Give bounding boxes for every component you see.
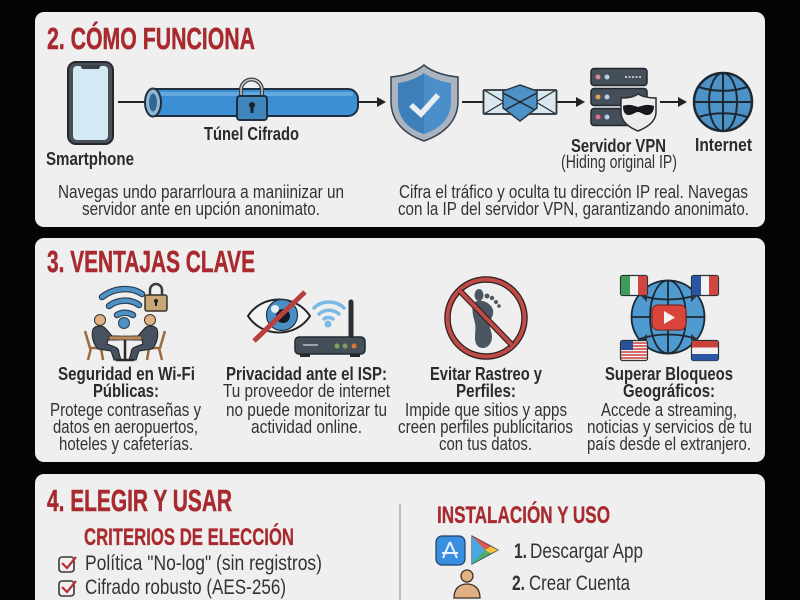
text: ISP advantage: [223, 364, 390, 437]
panel: cómo funciona: [35, 12, 765, 227]
text: cifrado: Cifrado robusto (AES-256): [85, 576, 286, 599]
text: wifi advantage: datos en aeropuertos,: [53, 417, 198, 437]
text: wifi advantage: hoteles y cafeterías.: [59, 434, 193, 454]
icon: smartphone: [68, 62, 113, 144]
icon: globe internet: [694, 73, 752, 131]
label: internet: Internet: [695, 135, 752, 155]
text: ISP advantage: Privacidad ante el ISP:: [226, 364, 387, 384]
text: geo-block advantage: Superar Bloqueos: [605, 364, 733, 384]
label: túnel cifrado: Túnel Cifrado: [204, 124, 299, 144]
arrow: envelope to server: [557, 97, 585, 107]
text: crear cuenta: Crear Cuenta: [529, 572, 630, 595]
text: wifi advantage: Protege contraseñas y: [50, 400, 201, 420]
text: tracking advantage: [398, 364, 573, 454]
icon: app store: [436, 536, 465, 565]
icon: crossed eye and router: [248, 292, 365, 357]
heading: elegir y usar: 4. ELEGIR Y USAR: [47, 483, 232, 518]
text: right description: Cifra el tráfico y oculta tu dirección IP real. Navegas: [399, 182, 748, 202]
text: descargar app: 1.: [514, 540, 527, 563]
icon: shield with check: [391, 65, 458, 141]
icon: no tracking footprint: [448, 280, 524, 356]
label: smartphone: Smartphone: [46, 149, 134, 169]
arrow: phone to tunnel: [118, 101, 146, 103]
icon: person: [454, 570, 480, 598]
arrow: shield to envelope: [462, 101, 484, 103]
text: geo-block advantage: Geográficos:: [623, 381, 715, 401]
label: hiding original IP: (Hiding original IP): [561, 152, 677, 172]
icon: public wifi with lock: [85, 284, 167, 360]
label: servidor VPN: Servidor VPN: [571, 136, 666, 156]
text: tracking advantage: creen perfiles publicitarios: [398, 417, 573, 437]
heading: cómo funciona: 2. CÓMO FUNCIONA: [47, 20, 255, 56]
icon: globe with video and flags: [620, 276, 718, 360]
text: descargar app: Descargar App: [530, 540, 643, 563]
text: left description: [58, 182, 344, 219]
text: left description: servidor ante en upción anonimato.: [82, 199, 320, 219]
heading: ventajas clave: 3. VENTAJAS CLAVE: [47, 244, 255, 279]
text: no-log: Política "No-log" (sin registros): [85, 552, 322, 575]
text: right description: [398, 182, 749, 219]
text: geo-block advantage: [587, 364, 752, 454]
arrow: server to internet: [660, 97, 687, 107]
text: tracking advantage: Impide que sitios y apps: [405, 400, 567, 420]
text: ISP advantage: actividad online.: [251, 417, 362, 437]
text: ISP advantage: Tu proveedor de internet: [223, 381, 390, 401]
panel: ventajas clave: [35, 238, 765, 462]
icon: checkbox 2: [59, 581, 76, 596]
text: geo-block advantage: país desde el extranjero.: [587, 434, 751, 454]
text: wifi advantage: [50, 364, 201, 454]
text: tracking advantage: con tus datos.: [439, 434, 532, 454]
arrow: tunnel to shield: [359, 97, 386, 107]
panel: elegir y usar: [35, 474, 765, 600]
text: ISP advantage: no puede monitorizar tu: [226, 400, 387, 420]
text: geo-block advantage: Accede a streaming,: [601, 400, 737, 420]
icon: encrypted envelope: [484, 85, 556, 121]
text: crear cuenta: 2.: [512, 572, 525, 595]
text: tracking advantage: Evitar Rastreo y: [430, 364, 542, 384]
icon: encrypted tunnel: [145, 80, 358, 120]
icon: VPN server with mask: [591, 68, 656, 131]
icon: google play: [472, 536, 498, 564]
text: wifi advantage: Públicas:: [93, 381, 159, 401]
icon: checkbox 1: [59, 557, 76, 572]
text: geo-block advantage: noticias y servicios de tu: [587, 417, 752, 437]
text: tracking advantage: Perfiles:: [456, 381, 516, 401]
text: wifi advantage: Seguridad en Wi-Fi: [58, 364, 195, 384]
subheading: instalación y uso: INSTALACIÓN Y USO: [437, 501, 610, 529]
text: left description: Navegas undo pararrloura a maniinizar un: [58, 182, 344, 202]
subheading: criterios de elección: CRITERIOS DE ELECCIÓN: [84, 523, 294, 551]
